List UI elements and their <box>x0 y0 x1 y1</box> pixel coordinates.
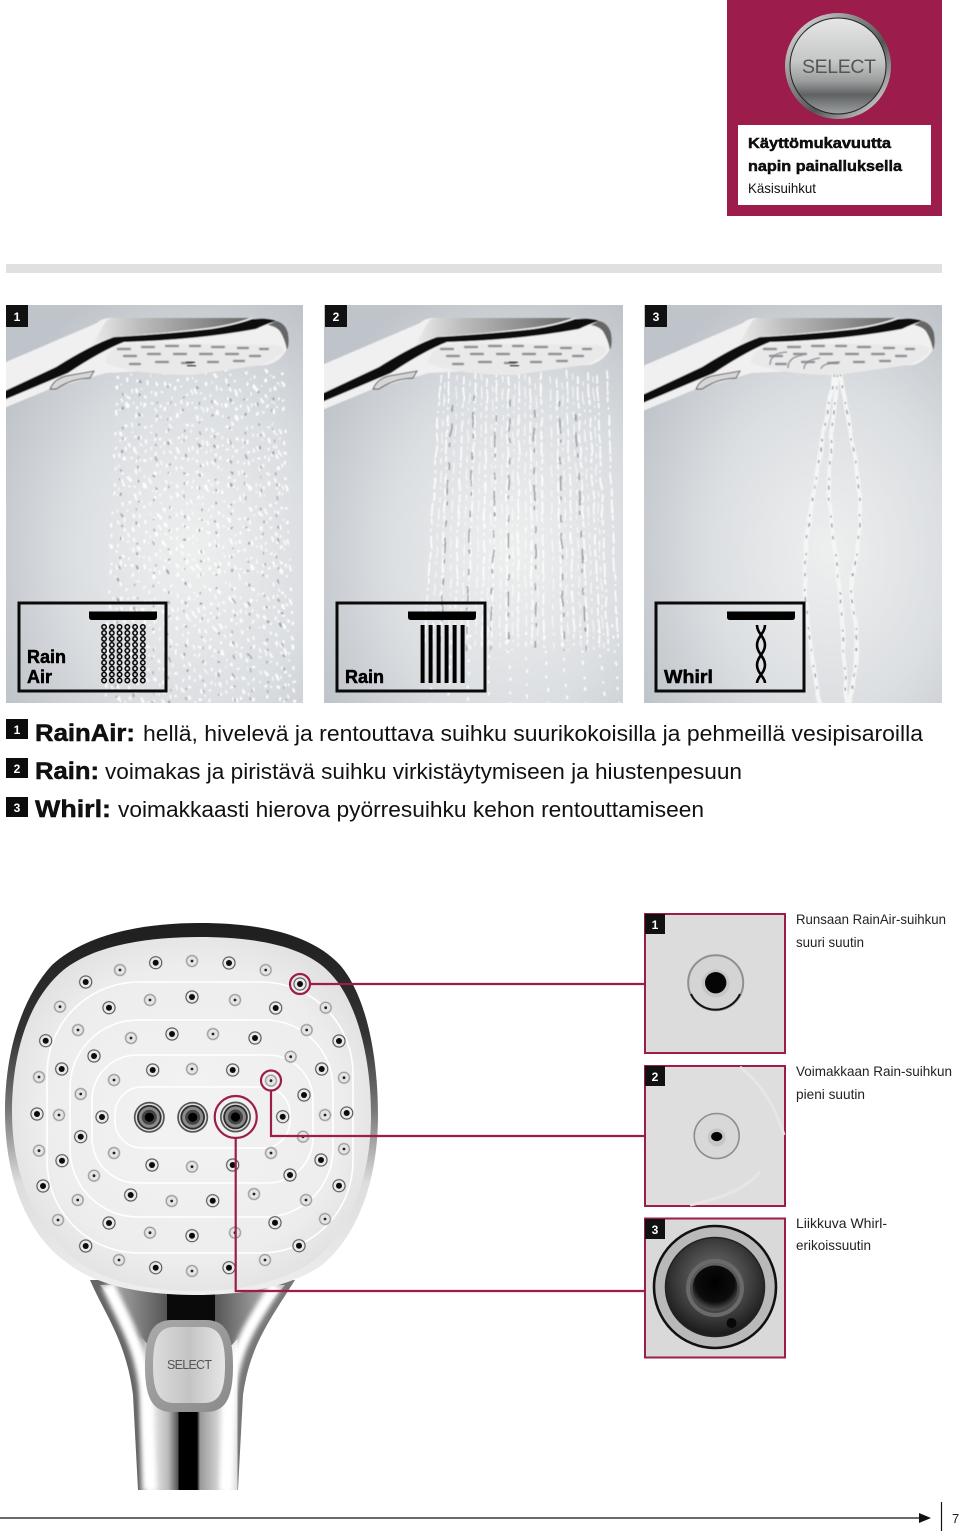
caption 1: Runsaan RainAir-suihkun <box>796 911 946 927</box>
legend row Whirl: Whirl: <box>35 796 111 823</box>
callout: leader lines and rings <box>215 974 645 1291</box>
number badge 2 <box>645 1066 665 1086</box>
number badge 3 <box>645 305 667 327</box>
caption 1: suuri suutin <box>796 934 864 950</box>
shower neck <box>90 1280 295 1490</box>
text block: select caption: Käyttömukavuutta <box>748 135 892 152</box>
shower face <box>12 937 371 1291</box>
legend row RainAir: 1 <box>14 723 21 737</box>
nozzle field <box>30 954 354 1278</box>
select button on handle: SELECT <box>167 1358 212 1372</box>
water: RainAir droplets <box>106 368 295 703</box>
icon: select button <box>785 13 891 119</box>
number badge 2 <box>325 305 347 327</box>
legend row RainAir: hellä, hivelevä ja rentouttava suihku suurikokoisilla ja pehmeillä vesipisaroilla <box>143 721 924 746</box>
panel: RainAir photo <box>0 305 303 703</box>
icon: Rain diagram: Rain <box>345 667 384 687</box>
number badge 3 <box>645 1219 665 1239</box>
legend row Whirl: voimakkaasti hierova pyörresuihku kehon rentouttamiseen <box>118 797 704 822</box>
icon: RainAir diagram: Air <box>27 667 52 687</box>
shower head shell <box>5 923 378 1295</box>
caption 3: Liikkuva Whirl- <box>796 1215 887 1231</box>
text block: select caption <box>738 125 931 205</box>
panel: select badge <box>727 0 942 216</box>
footer arrow <box>0 1513 931 1523</box>
legend row RainAir: RainAir: <box>35 720 135 747</box>
caption 3 <box>796 1215 887 1253</box>
page number: 7 <box>952 1511 959 1526</box>
caption 2: Voimakkaan Rain-suihkun <box>796 1063 952 1079</box>
number badge 3: 3 <box>652 1223 659 1237</box>
number badge 1 <box>645 914 665 934</box>
icon: large RainAir nozzle <box>688 955 743 1010</box>
icon: RainAir diagram <box>19 603 166 691</box>
panel: Whirl photo <box>638 305 942 703</box>
water: Whirl strands <box>805 373 860 703</box>
text block: select caption: napin painalluksella <box>748 158 903 175</box>
panel: hand shower front view <box>5 923 378 1495</box>
panel: Rain photo <box>315 305 623 703</box>
legend row Rain: voimakas ja piristävä suihku virkistäytymiseen ja hiustenpesuun <box>105 759 742 784</box>
text block: select caption: Käsisuihkut <box>748 180 816 196</box>
legend row Rain: 2 <box>14 762 21 776</box>
caption 2: pieni suutin <box>796 1086 865 1102</box>
number badge 2: 2 <box>652 1070 659 1084</box>
legend row Whirl: 3 <box>14 801 21 815</box>
icon: RainAir diagram: Rain <box>27 647 66 667</box>
icon: Rain diagram <box>337 603 485 691</box>
select button on handle <box>145 1320 233 1412</box>
icon: Whirl nozzle <box>654 1226 776 1348</box>
caption 3: erikoissuutin <box>796 1237 871 1253</box>
panel: nozzle detail 1 <box>645 911 946 1053</box>
number badge 2: 2 <box>333 310 340 324</box>
number badge 1 <box>6 305 28 327</box>
number badge 1: 1 <box>652 918 659 932</box>
legend row Rain: Rain: <box>35 758 99 785</box>
icon: Whirl diagram <box>656 603 804 691</box>
number badge 1: 1 <box>14 310 21 324</box>
caption 1 <box>796 911 946 950</box>
icon: select button: SELECT <box>802 56 876 78</box>
number badge 3: 3 <box>653 310 660 324</box>
panel: nozzle detail 3 <box>645 1215 887 1358</box>
icon: Whirl diagram: Whirl <box>664 667 713 687</box>
water: Rain streaks <box>424 370 619 703</box>
icon: small Rain nozzle <box>694 1114 739 1158</box>
text block: mode legend <box>6 719 924 823</box>
panel: nozzle detail 2 <box>645 1063 952 1206</box>
caption 2 <box>796 1063 952 1102</box>
